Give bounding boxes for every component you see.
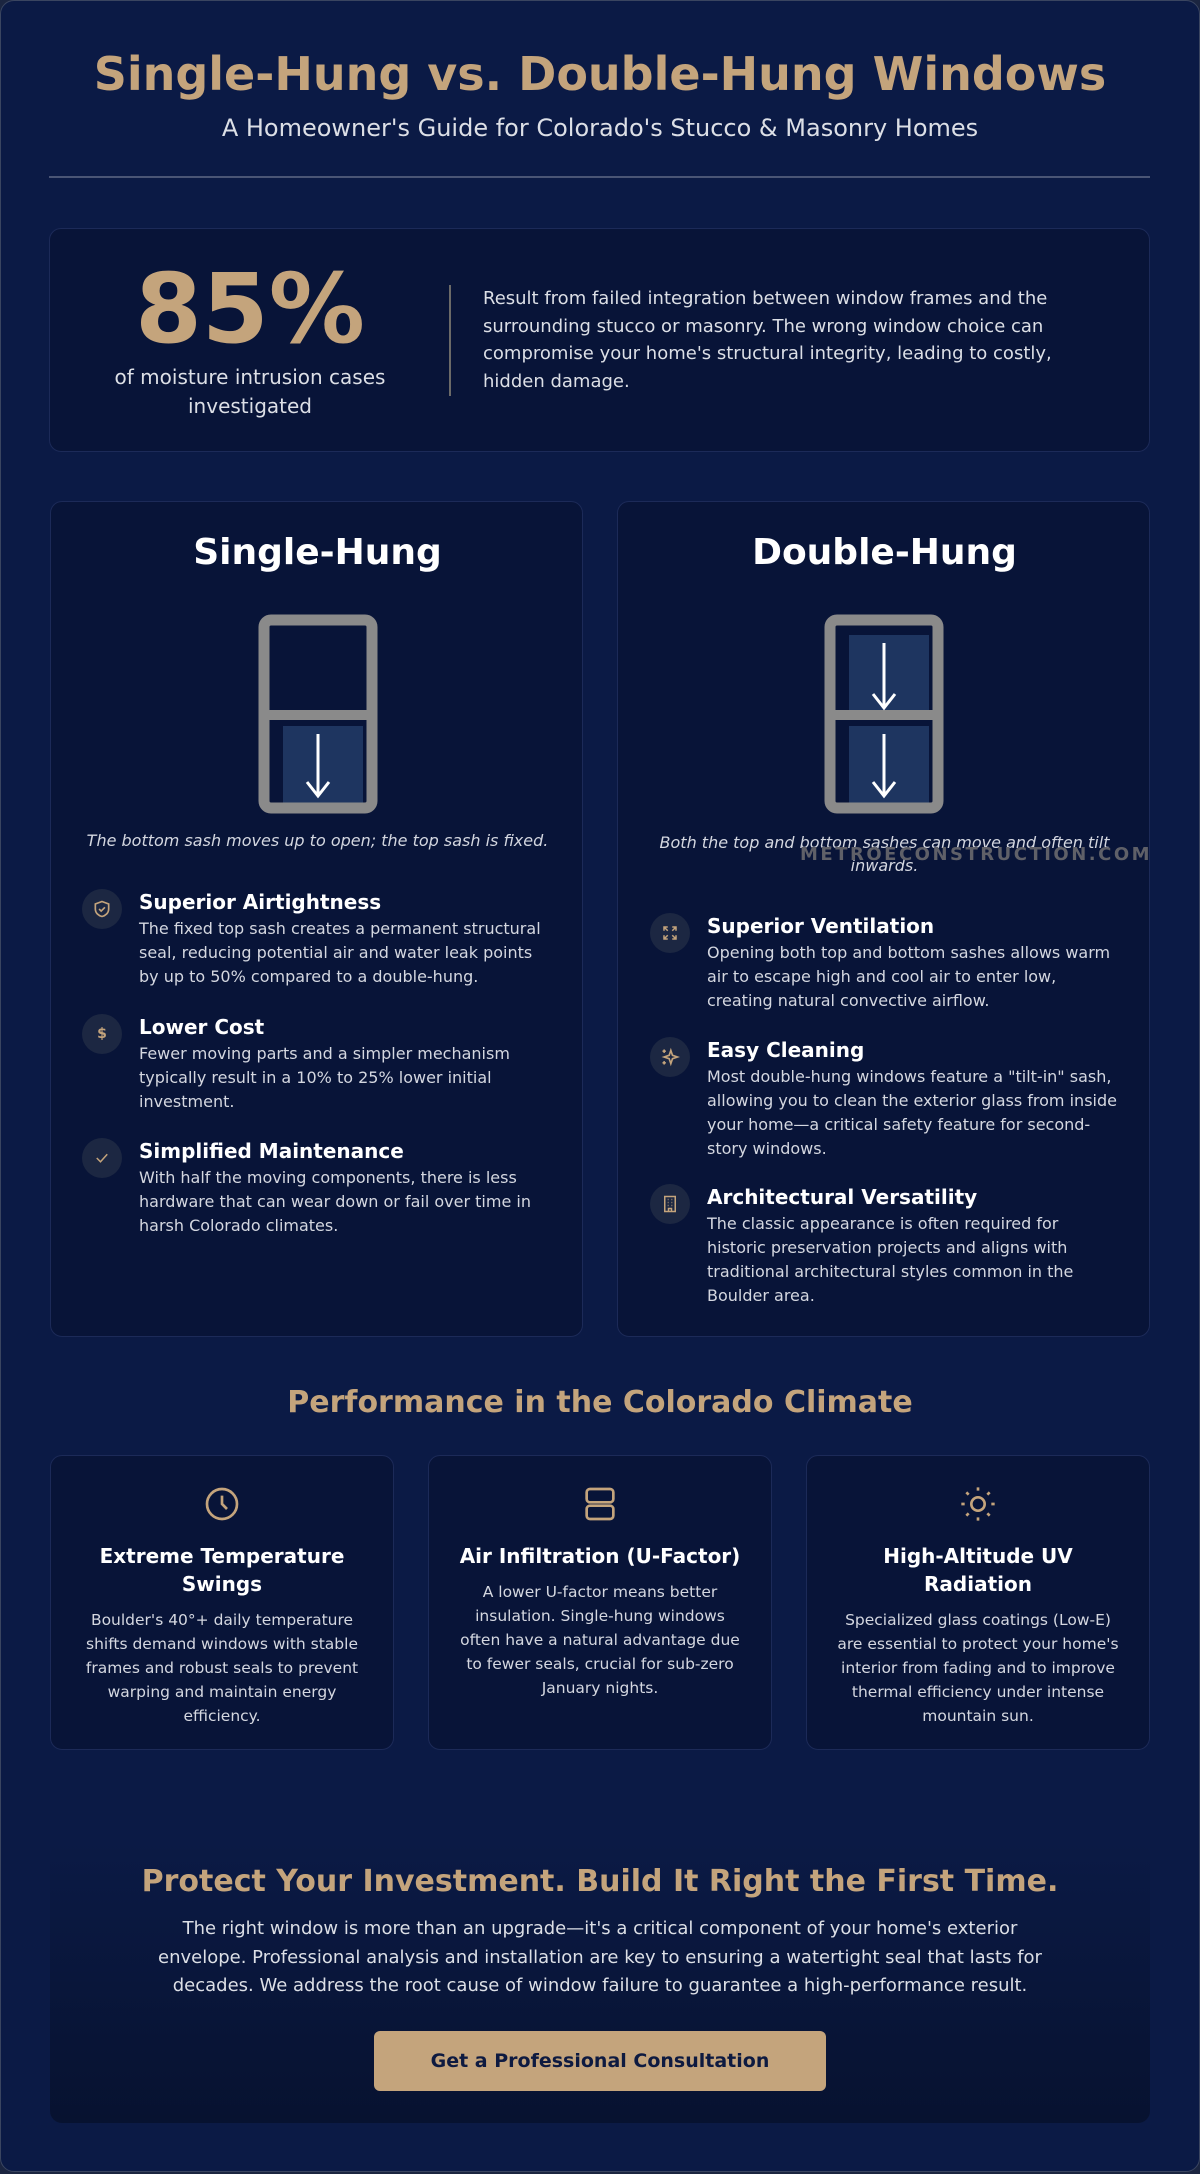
feature: maintenance: Simplified Maintenance xyxy=(139,1139,404,1163)
card: uv: are essential to protect your home's xyxy=(837,1635,1119,1653)
icon: panels xyxy=(585,1488,615,1520)
feature: versatility: historic preservation projects and aligns with xyxy=(707,1238,1067,1257)
feature: airtightness: Superior Airtightness xyxy=(139,890,381,914)
feature: maintenance xyxy=(82,1138,531,1235)
panel: stat xyxy=(49,228,1150,452)
feature: airtightness: seal, reducing potential air and water leak points xyxy=(139,943,532,962)
feature: lower cost xyxy=(82,1014,510,1111)
card: uv: Radiation xyxy=(924,1572,1032,1596)
feature: lower cost: Lower Cost xyxy=(139,1015,264,1039)
card: air infiltration: Air Infiltration (U-Factor) xyxy=(460,1544,740,1568)
card: air infiltration: January nights. xyxy=(542,1679,658,1697)
card: temperature: Boulder's 40°+ daily temperature xyxy=(91,1611,353,1629)
icon: sun xyxy=(961,1487,995,1521)
stat description: Result from failed integration between window frames and the surrounding stucco or masonry. The wrong window choice can compromise your home's structural integrity, leading to costly, hidden damage. xyxy=(483,288,1052,392)
button xyxy=(374,2031,826,2091)
feature: maintenance: harsh Colorado climates. xyxy=(139,1216,338,1235)
feature: maintenance: With half the moving components, there is less xyxy=(139,1168,517,1187)
heading: Double-Hung xyxy=(752,532,1017,573)
feature: ventilation: Superior Ventilation xyxy=(707,914,934,938)
feature: cleaning: Easy Cleaning xyxy=(707,1038,864,1062)
feature: cleaning: allowing you to clean the exterior glass from inside xyxy=(707,1091,1117,1110)
card: temperature: Extreme Temperature xyxy=(100,1544,344,1568)
feature: versatility: traditional architectural styles common in the xyxy=(707,1262,1073,1281)
feature: cleaning: story windows. xyxy=(707,1139,827,1158)
feature: cleaning xyxy=(650,1037,1117,1158)
card: temperature: warping and maintain energy xyxy=(108,1683,336,1701)
card: temperature: Swings xyxy=(182,1572,262,1596)
card: uv: Specialized glass coatings (Low-E) xyxy=(845,1611,1111,1629)
card: air infiltration: A lower U-factor means better xyxy=(483,1583,717,1601)
card: uv: interior from fading and to improve xyxy=(841,1659,1115,1677)
feature: ventilation: creating natural convective airflow. xyxy=(707,991,989,1010)
feature: airtightness: The fixed top sash creates a permanent structural xyxy=(139,919,541,938)
cta text: The right window is more than an upgrade—it's a critical component of your home's exterior envelope. Professional analysis and installation are key to ensuring a watertight seal that lasts for decades. We address the root cause of window failure to guarantee a high-performance result. xyxy=(158,1918,1042,1996)
card: uv: thermal efficiency under intense xyxy=(852,1683,1104,1701)
card: temperature xyxy=(50,1455,394,1750)
heading: Single-Hung xyxy=(193,532,442,573)
section heading: climate: Performance in the Colorado Climate xyxy=(287,1385,913,1420)
title: Single-Hung vs. Double-Hung Windows xyxy=(94,47,1106,101)
icon: single-hung window xyxy=(258,614,378,814)
stat caption: of moisture intrusion cases investigated xyxy=(115,365,385,418)
stat number: 85% xyxy=(135,253,365,365)
card: temperature: efficiency. xyxy=(183,1707,261,1725)
feature: lower cost: Fewer moving parts and a simpler mechanism xyxy=(139,1044,510,1063)
card: temperature: shifts demand windows with stable xyxy=(86,1635,358,1653)
panel: call to action xyxy=(50,1843,1150,2123)
panel: single-hung xyxy=(50,501,583,1337)
panel: double-hung xyxy=(617,501,1150,1337)
caption: The bottom sash moves up to open; the top sash is fixed. xyxy=(87,831,548,850)
button: Get a Professional Consultation xyxy=(431,2050,769,2072)
cta heading: Protect Your Investment. Build It Right the First Time. xyxy=(142,1864,1058,1899)
card: air infiltration: often have a natural advantage due xyxy=(460,1631,740,1649)
feature: versatility: Boulder area. xyxy=(707,1286,815,1305)
feature: airtightness: by up to 50% compared to a double-hung. xyxy=(139,967,478,986)
card: air infiltration xyxy=(428,1455,772,1750)
feature: ventilation: air to escape high and cool air to enter low, xyxy=(707,967,1056,986)
card: air infiltration: to fewer seals, crucial for sub-zero xyxy=(466,1655,734,1673)
caption: Both the top and bottom sashes can move and often tilt inwards. xyxy=(660,833,1109,875)
feature: lower cost: investment. xyxy=(139,1092,234,1111)
card: temperature: frames and robust seals to prevent xyxy=(86,1659,358,1677)
feature: versatility: Architectural Versatility xyxy=(707,1185,977,1209)
card: uv: High-Altitude UV xyxy=(883,1544,1073,1568)
icon: double-hung window xyxy=(824,614,944,814)
feature: airtightness xyxy=(82,889,541,986)
feature: lower cost: typically result in a 10% to 25% lower initial xyxy=(139,1068,492,1087)
subtitle: A Homeowner's Guide for Colorado's Stucco & Masonry Homes xyxy=(222,114,978,142)
watermark: METROECONSTRUCTION.COM xyxy=(800,844,1152,865)
feature: cleaning: your home—a critical safety feature for second- xyxy=(707,1115,1090,1134)
card: uv xyxy=(806,1455,1150,1750)
feature: versatility: The classic appearance is often required for xyxy=(707,1214,1058,1233)
feature: cleaning: Most double-hung windows feature a "tilt-in" sash, xyxy=(707,1067,1111,1086)
feature: ventilation: Opening both top and bottom sashes allows warm xyxy=(707,943,1110,962)
feature: ventilation xyxy=(650,913,1110,1010)
feature: maintenance: hardware that can wear down or fail over time in xyxy=(139,1192,531,1211)
icon: clock xyxy=(206,1488,238,1520)
feature: lower cost: $ xyxy=(97,1026,107,1042)
feature: versatility xyxy=(650,1184,1073,1305)
card: air infiltration: insulation. Single-hung windows xyxy=(475,1607,725,1625)
card: uv: mountain sun. xyxy=(922,1707,1034,1725)
